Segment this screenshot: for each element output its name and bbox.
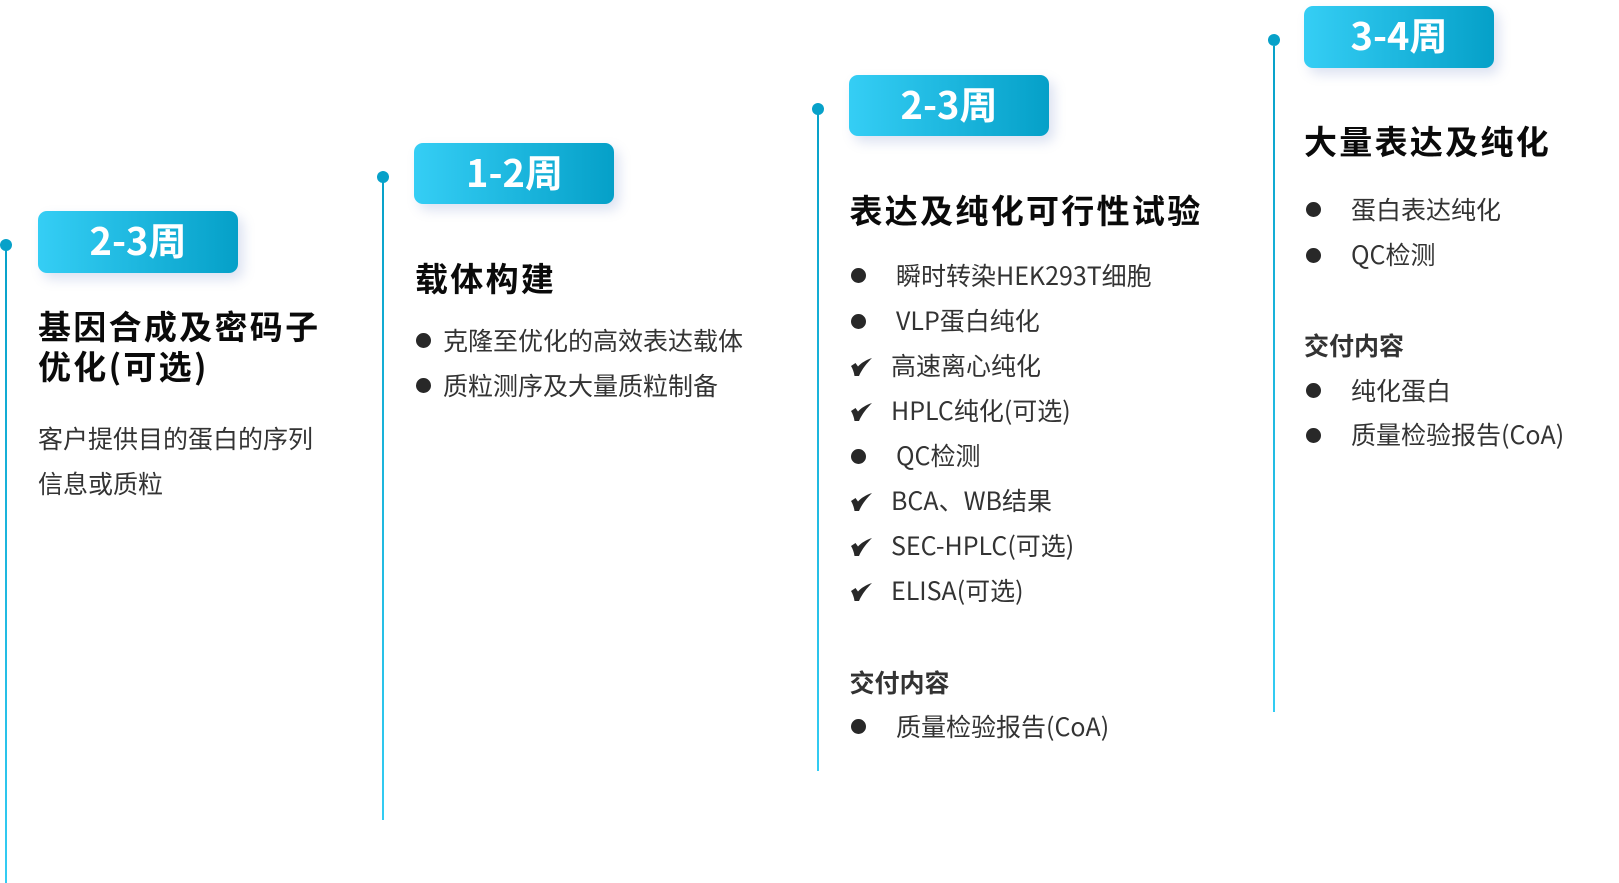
duration badge 2: 1-2周 bbox=[466, 143, 563, 198]
item 2: 质粒测序及大量质粒制备 bbox=[443, 367, 718, 403]
check bbox=[851, 403, 872, 421]
check bbox=[851, 583, 872, 601]
bullet 1 bbox=[416, 333, 431, 348]
timeline dot 4 bbox=[1268, 34, 1280, 46]
step 3: feasibility trial bbox=[812, 75, 1202, 771]
timeline line 2 bbox=[382, 178, 384, 820]
item: 蛋白表达纯化 bbox=[1351, 191, 1501, 227]
bullet bbox=[851, 449, 866, 464]
bullet bbox=[1306, 202, 1320, 217]
item: 质量检验报告(CoA) bbox=[896, 708, 1109, 744]
deliverables heading: 交付内容 bbox=[850, 664, 950, 700]
timeline line 4 bbox=[1273, 46, 1275, 712]
bullet bbox=[1306, 248, 1320, 263]
step 1: gene synthesis bbox=[0, 211, 320, 883]
item: 纯化蛋白 bbox=[1351, 372, 1451, 408]
item: HPLC纯化(可选) bbox=[891, 392, 1071, 428]
timeline line 3 bbox=[817, 112, 819, 771]
duration badge 3 bbox=[849, 75, 1049, 136]
check bbox=[851, 493, 872, 511]
item: QC检测 bbox=[896, 437, 981, 473]
bullet bbox=[851, 719, 866, 734]
bullet bbox=[1306, 428, 1320, 443]
item: ELISA(可选) bbox=[891, 572, 1024, 608]
heading 4: 大量表达及纯化 bbox=[1304, 116, 1551, 164]
item: 质量检验报告(CoA) bbox=[1351, 416, 1564, 452]
timeline dot 3 bbox=[812, 103, 824, 115]
heading 2: 载体构建 bbox=[415, 253, 556, 301]
duration badge 1: 2-3周 bbox=[90, 211, 186, 266]
bullet 2 bbox=[416, 378, 431, 393]
duration badge 2 bbox=[414, 143, 614, 204]
item: SEC-HPLC(可选) bbox=[891, 527, 1074, 563]
bullet bbox=[1306, 383, 1320, 398]
heading 1: 优化(可选) bbox=[38, 341, 209, 389]
item: 瞬时转染HEK293T细胞 bbox=[896, 257, 1152, 293]
duration badge 4 bbox=[1304, 6, 1494, 68]
heading 1 bbox=[38, 301, 320, 389]
heading 3: 表达及纯化可行性试验 bbox=[850, 184, 1202, 232]
deliverables heading: 交付内容 bbox=[1304, 327, 1404, 363]
check bbox=[851, 358, 872, 376]
description line 2: 信息或质粒 bbox=[38, 465, 163, 501]
item: BCA、WB结果 bbox=[891, 482, 1052, 518]
check bbox=[851, 538, 872, 556]
heading 1: 基因合成及密码子 bbox=[38, 301, 320, 349]
duration badge 3: 2-3周 bbox=[901, 75, 997, 130]
item: VLP蛋白纯化 bbox=[896, 302, 1040, 338]
timeline dot 2 bbox=[377, 171, 389, 183]
timeline line 1 bbox=[5, 245, 7, 883]
duration badge 4: 3-4周 bbox=[1351, 6, 1447, 61]
bullet bbox=[851, 268, 866, 283]
item 1: 克隆至优化的高效表达载体 bbox=[443, 322, 743, 358]
bullet bbox=[851, 314, 866, 329]
item: 高速离心纯化 bbox=[891, 347, 1041, 383]
timeline dot 1 bbox=[0, 239, 12, 251]
step 2: vector construction bbox=[377, 143, 743, 820]
item: QC检测 bbox=[1351, 236, 1436, 272]
description line 1: 客户提供目的蛋白的序列 bbox=[38, 420, 313, 456]
duration badge 1 bbox=[38, 211, 238, 272]
